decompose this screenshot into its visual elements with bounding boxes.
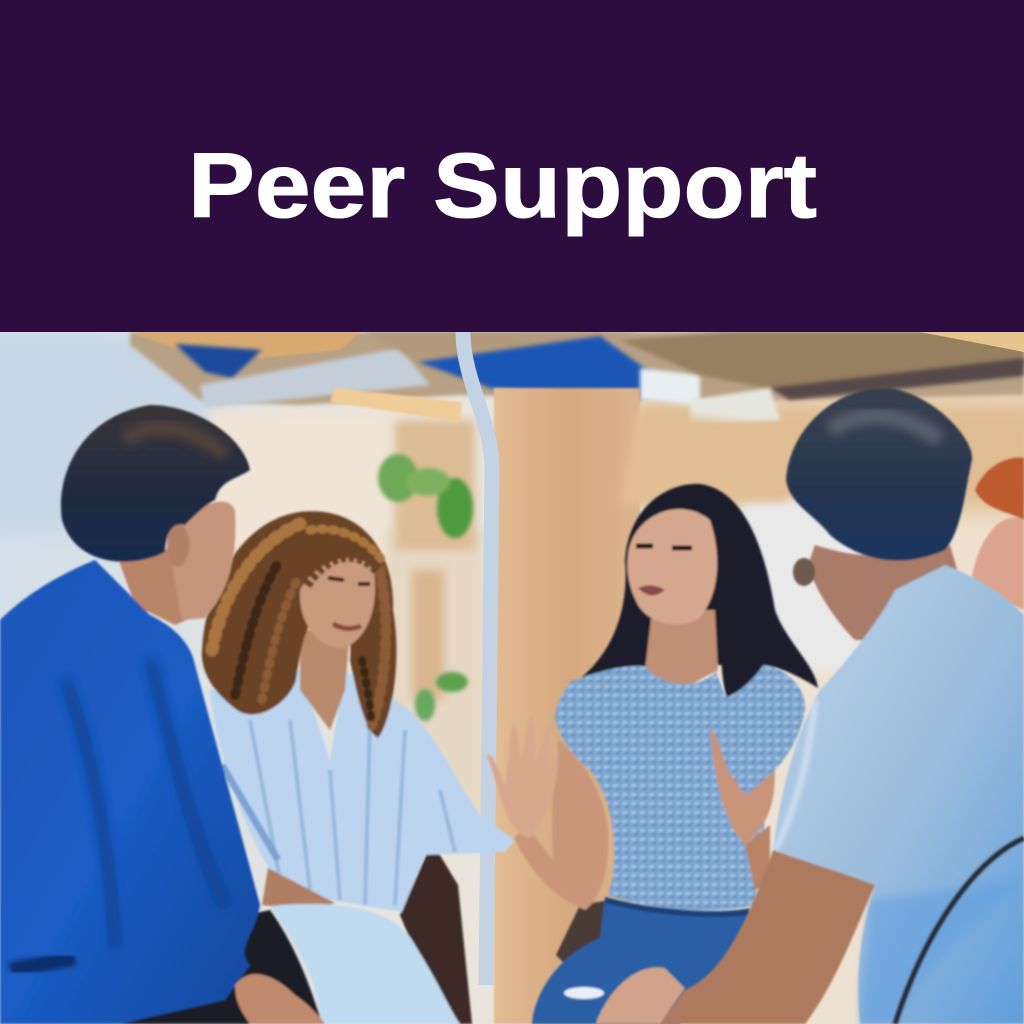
curls on forehead xyxy=(306,556,378,585)
chair centre xyxy=(556,900,610,1000)
curly hair xyxy=(202,511,396,738)
person: man in blue shirt, left xyxy=(0,405,325,1024)
eyes and mouth xyxy=(636,546,692,548)
jeans tear xyxy=(564,987,604,999)
blue shirt xyxy=(0,560,260,1024)
trousers xyxy=(270,904,460,1024)
face xyxy=(170,501,235,620)
short dark hair xyxy=(61,405,250,562)
person: woman with curly hair xyxy=(202,511,515,1024)
jeans belt xyxy=(605,900,750,914)
person: woman far right xyxy=(972,457,1024,610)
front hair locks xyxy=(715,560,778,697)
striped shirt xyxy=(210,670,515,912)
chair left xyxy=(400,842,472,1024)
photo: peer support group conversation xyxy=(0,332,1024,1024)
dark hair xyxy=(786,388,972,561)
raised hand right xyxy=(710,728,775,845)
ceiling xyxy=(130,332,1024,425)
ear xyxy=(167,523,189,567)
person: woman in centre xyxy=(487,484,818,1024)
neck xyxy=(300,630,350,730)
wooden beam right xyxy=(620,405,790,505)
light blue shirt xyxy=(773,565,1024,1024)
neck xyxy=(645,610,718,690)
textured blue top xyxy=(555,665,805,910)
background: room xyxy=(0,332,1024,1024)
raised hand left xyxy=(487,715,558,838)
dark trousers and chair xyxy=(78,910,322,1024)
face xyxy=(627,509,717,624)
chair frame xyxy=(895,838,1024,1024)
jeans xyxy=(532,897,750,1024)
header band xyxy=(0,0,1024,332)
wooden pillar xyxy=(494,388,640,1024)
glasses xyxy=(793,558,815,586)
eyes and mouth xyxy=(328,578,370,584)
title: Peer Support xyxy=(188,135,817,237)
man's hand xyxy=(235,974,325,1024)
clasped hand xyxy=(596,967,685,1024)
forearm xyxy=(262,868,335,910)
plant xyxy=(378,454,473,721)
neck and face xyxy=(808,545,960,640)
long dark hair xyxy=(576,484,818,688)
face xyxy=(300,558,375,648)
conduit pipe xyxy=(463,332,492,985)
man's arm xyxy=(660,850,875,1024)
neck xyxy=(115,540,205,625)
woman's arm xyxy=(514,740,608,910)
person: man in light shirt, right xyxy=(596,388,1024,1024)
